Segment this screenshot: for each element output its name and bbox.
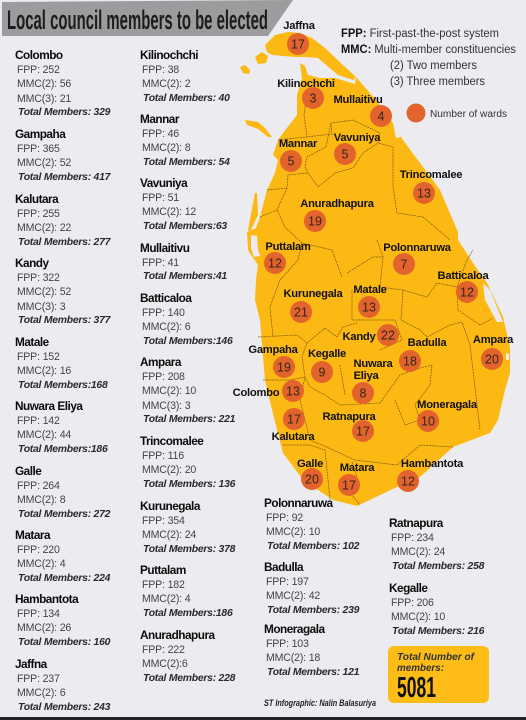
Kandy: Kandy	[15, 256, 49, 270]
Matara: Total Members: 224	[18, 573, 110, 584]
Colombo: MMC(3): 21	[17, 93, 71, 105]
district: Colombo: 13	[286, 384, 300, 398]
Kegalle: Kegalle	[389, 581, 427, 595]
Ratnapura: Ratnapura	[389, 516, 443, 530]
Puttalam: Total Members:186	[143, 608, 232, 619]
Moneragala	[264, 622, 359, 678]
Kandy: MMC(3): 3	[17, 301, 65, 313]
Ratnapura	[389, 516, 484, 572]
district: Kandy: 22	[381, 328, 395, 342]
total members box	[388, 646, 489, 704]
district: Kilinochchi: Kilinochchi	[277, 78, 335, 90]
Hambantota: Hambantota	[15, 592, 78, 606]
Kegalle: MMC(2): 10	[391, 611, 445, 623]
district: Nuwara Eliya: Nuwara	[354, 358, 393, 370]
Nuwara Eliya: Total Members:186	[18, 444, 108, 455]
Nuwara Eliya: Nuwara Eliya	[15, 399, 82, 413]
Ampara: MMC(3): 3	[142, 400, 190, 412]
district: Kilinochchi	[277, 78, 335, 109]
Kalutara: FPP: 255	[17, 208, 60, 220]
bottom bar	[0, 717, 526, 720]
district: Puttalam	[264, 241, 311, 274]
district: Kegalle	[308, 348, 346, 383]
Anuradhapura	[140, 628, 236, 684]
district: Jaffna: Jaffna	[283, 20, 316, 32]
Anuradhapura: Total Members: 228	[143, 673, 235, 684]
Jaffna: Total Members: 243	[18, 702, 110, 713]
district: Ampara	[473, 334, 514, 370]
Kalutara: Kalutara	[15, 192, 58, 206]
district: Badulla: 18	[403, 354, 417, 368]
Kalutara: MMC(2): 22	[17, 222, 71, 234]
Colombo	[15, 48, 110, 118]
Vavuniya: FPP: 51	[142, 192, 179, 204]
legend: abbreviations: MMC: Multi-member constituencies	[341, 44, 516, 56]
Galle: Galle	[15, 464, 41, 478]
Mullaitivu	[140, 241, 227, 282]
district: Mannar: Mannar	[279, 138, 318, 150]
Vavuniya: Vavuniya	[140, 176, 187, 190]
Anuradhapura: FPP: 222	[142, 644, 185, 656]
district: Badulla	[399, 337, 447, 372]
district: Kalutara: 17	[287, 412, 301, 426]
Batticaloa: Total Members:146	[143, 336, 232, 347]
district: Hambantota	[397, 458, 464, 492]
Ampara: MMC(2): 10	[142, 385, 196, 397]
district: Matale: Matale	[353, 284, 387, 296]
Matale: Total Members:168	[18, 380, 108, 391]
district: Polonnaruwa: 7	[401, 258, 408, 272]
district: Anuradhapura	[300, 198, 375, 232]
district: Ratnapura: 17	[356, 424, 370, 438]
district: Kegalle: 9	[319, 366, 326, 380]
district: Moneragala: 10	[421, 414, 435, 428]
district: Hambantota: Hambantota	[401, 458, 464, 470]
Kurunegala: FPP: 354	[142, 515, 185, 527]
Vavuniya	[140, 176, 227, 232]
Jaffna: Jaffna	[15, 657, 47, 671]
Kilinochchi: FPP: 38	[142, 64, 179, 76]
Colombo: Total Members: 329	[18, 107, 110, 118]
Colombo: MMC(2): 56	[17, 78, 71, 90]
district: Kandy: Kandy	[343, 331, 376, 343]
Batticaloa	[140, 291, 233, 347]
district: Kurunegala: Kurunegala	[283, 288, 344, 300]
Jaffna: FPP: 237	[17, 673, 60, 685]
Mannar: Total Members: 54	[143, 157, 230, 168]
Kurunegala	[140, 499, 236, 555]
district: Moneragala: Moneragala	[417, 399, 478, 411]
Badulla: FPP: 197	[266, 576, 309, 588]
Matara	[15, 528, 110, 584]
Kilinochchi: Total Members: 40	[143, 93, 230, 104]
Kilinochchi: Kilinochchi	[140, 48, 198, 62]
Hambantota: MMC(2): 26	[17, 622, 71, 634]
Batticaloa: MMC(2): 6	[142, 321, 190, 333]
district: Matara	[338, 462, 375, 496]
Trincomalee: Trincomalee	[140, 434, 203, 448]
district: Galle	[297, 458, 323, 490]
Kilinochchi	[140, 48, 230, 104]
Gampaha: Gampaha	[15, 127, 65, 141]
Polonnaruwa: FPP: 92	[266, 512, 303, 524]
district: Mullaitivu: 4	[378, 110, 385, 124]
district: Kegalle: Kegalle	[308, 348, 346, 360]
Kurunegala: Kurunegala	[140, 499, 200, 513]
district: Moneragala	[417, 399, 478, 432]
Ampara: FPP: 208	[142, 371, 185, 383]
legend: abbreviations: (3) Three members	[390, 76, 485, 88]
legend: number of wards: Number of wards	[430, 109, 507, 120]
Badulla: Badulla	[264, 560, 303, 574]
district: Nuwara Eliya: Eliya	[354, 370, 379, 382]
Vavuniya: Total Members:63	[143, 221, 227, 232]
Anuradhapura: MMC(2):6	[142, 658, 188, 670]
district: Colombo	[233, 380, 304, 402]
district: Mannar	[279, 138, 318, 172]
legend: abbreviations: FPP: First-past-the-post system	[341, 28, 499, 40]
district: Mullaitivu	[333, 94, 392, 127]
Ratnapura: MMC(2): 24	[391, 546, 445, 558]
Gampaha: FPP: 365	[17, 143, 60, 155]
Ratnapura: Total Members: 258	[392, 561, 484, 572]
title band	[2, 0, 293, 36]
Colombo: Colombo	[15, 48, 63, 62]
district: Gampaha: Gampaha	[248, 344, 299, 356]
district: Hambantota: 12	[401, 474, 415, 488]
district: Ampara: Ampara	[473, 334, 514, 346]
Batticaloa: FPP: 140	[142, 307, 185, 319]
Kurunegala: MMC(2): 24	[142, 529, 196, 541]
Gampaha	[15, 127, 111, 183]
Ampara: Ampara	[140, 355, 181, 369]
Kilinochchi: MMC(2): 2	[142, 78, 190, 90]
Polonnaruwa: Polonnaruwa	[264, 496, 333, 510]
Moneragala: Moneragala	[264, 622, 325, 636]
Badulla: MMC(2): 42	[266, 590, 320, 602]
Mullaitivu: Total Members:41	[143, 271, 227, 282]
Hambantota: FPP: 134	[17, 608, 60, 620]
district: Vavuniya: 5	[342, 148, 349, 162]
Matale: MMC(2): 16	[17, 365, 71, 377]
Moneragala: Total Members: 121	[267, 667, 359, 678]
Puttalam	[140, 563, 233, 619]
district: Gampaha	[248, 344, 299, 378]
district: Matara: Matara	[340, 462, 375, 474]
Hambantota	[15, 592, 110, 648]
Colombo: FPP: 252	[17, 64, 60, 76]
district: Matara: 17	[342, 478, 356, 492]
district: Polonnaruwa	[383, 242, 452, 275]
district: Mannar: 5	[288, 154, 295, 168]
Puttalam: FPP: 182	[142, 579, 185, 591]
district: Jaffna: 17	[291, 38, 305, 52]
lagoons	[251, 123, 509, 360]
Polonnaruwa	[264, 496, 360, 552]
Matara: FPP: 220	[17, 544, 60, 556]
total members box: members:	[397, 662, 444, 674]
Mannar: FPP: 46	[142, 128, 179, 140]
district: Kurunegala	[283, 288, 344, 323]
legend: abbreviations	[341, 28, 516, 88]
district: Kalutara	[272, 408, 315, 443]
Mullaitivu: Mullaitivu	[140, 241, 189, 255]
Ratnapura: FPP: 234	[391, 532, 434, 544]
Nuwara Eliya: MMC(2): 44	[17, 429, 71, 441]
Vavuniya: MMC(2): 12	[142, 206, 196, 218]
Polonnaruwa: MMC(2): 10	[266, 526, 320, 538]
legend: number of wards	[406, 104, 507, 122]
district: Ratnapura: Ratnapura	[322, 411, 377, 423]
Mannar: MMC(2): 8	[142, 142, 190, 154]
Matara: Matara	[15, 528, 50, 542]
district: Gampaha: 19	[277, 360, 291, 374]
district: Trincomalee: Trincomalee	[400, 169, 462, 181]
district: Puttalam: 12	[268, 256, 282, 270]
Matale	[15, 335, 108, 391]
Trincomalee	[140, 434, 236, 490]
Galle: Total Members: 272	[18, 509, 110, 520]
Gampaha: Total Members: 417	[18, 172, 110, 183]
Jaffna	[15, 657, 110, 713]
district: Matale	[353, 284, 387, 318]
Kegalle: FPP: 206	[391, 597, 434, 609]
legend: abbreviations: (2) Two members	[390, 60, 477, 72]
Kandy	[15, 256, 111, 326]
district: Batticaloa: Batticaloa	[438, 270, 490, 282]
district: Puttalam: Puttalam	[265, 241, 311, 253]
Ampara	[140, 355, 235, 425]
Badulla	[264, 560, 360, 616]
Kandy: Total Members: 377	[18, 315, 110, 326]
Matale: Matale	[15, 335, 49, 349]
Mannar	[140, 112, 230, 168]
Matale: FPP: 152	[17, 351, 60, 363]
total members box: 5081	[397, 672, 436, 704]
Kandy: MMC(2): 52	[17, 286, 71, 298]
district: Vavuniya	[334, 132, 381, 165]
district: Anuradhapura: Anuradhapura	[300, 198, 375, 210]
Badulla: Total Members: 239	[267, 605, 359, 616]
Batticaloa: Batticaloa	[140, 291, 191, 305]
Kalutara: Total Members: 277	[18, 237, 110, 248]
Trincomalee: Total Members: 136	[143, 479, 235, 490]
district: Nuwara Eliya	[352, 358, 393, 404]
district: Galle: 20	[305, 472, 319, 486]
district: Galle: Galle	[297, 458, 323, 470]
Galle	[15, 464, 110, 520]
Kurunegala: Total Members: 378	[143, 544, 235, 555]
Moneragala: MMC(2): 18	[266, 652, 320, 664]
district: Nuwara Eliya: 8	[360, 386, 367, 400]
district: Batticaloa: 12	[460, 286, 474, 300]
Mannar: Mannar	[140, 112, 179, 126]
district: Ratnapura	[322, 411, 377, 442]
district: Anuradhapura: 19	[308, 214, 322, 228]
Nuwara Eliya: FPP: 142	[17, 415, 60, 427]
district: Ampara: 20	[485, 352, 499, 366]
Galle: FPP: 264	[17, 480, 60, 492]
district: Jaffna	[283, 20, 316, 55]
Moneragala: FPP: 103	[266, 638, 309, 650]
Puttalam: MMC(2): 4	[142, 593, 190, 605]
district: Trincomalee: 13	[417, 186, 431, 200]
Ampara: Total Members: 221	[143, 414, 235, 425]
district: Polonnaruwa: Polonnaruwa	[383, 242, 452, 254]
Hambantota: Total Members: 160	[18, 637, 110, 648]
Gampaha: MMC(2): 52	[17, 157, 71, 169]
Trincomalee: FPP: 116	[142, 450, 184, 462]
Trincomalee: MMC(2): 20	[142, 464, 196, 476]
Matara: MMC(2): 4	[17, 558, 65, 570]
Mullaitivu: FPP: 41	[142, 257, 179, 269]
Kegalle: Total Members: 216	[392, 626, 484, 637]
Jaffna: MMC(2): 6	[17, 687, 65, 699]
Polonnaruwa: Total Members: 102	[267, 541, 359, 552]
district: Badulla: Badulla	[408, 337, 447, 349]
district: Batticaloa	[438, 270, 490, 303]
district: Kurunegala: 21	[294, 306, 308, 320]
total members box: Total Number of	[397, 651, 475, 663]
Galle: MMC(2): 8	[17, 494, 65, 506]
district: Kandy	[343, 324, 399, 346]
Kandy: FPP: 322	[17, 272, 60, 284]
Kegalle	[389, 581, 484, 637]
Kalutara	[15, 192, 111, 248]
district: Vavuniya: Vavuniya	[334, 132, 381, 144]
district: Matale: 13	[362, 300, 376, 314]
district: Kalutara: Kalutara	[272, 431, 315, 443]
district: Trincomalee	[400, 169, 462, 204]
Nuwara Eliya	[15, 399, 108, 455]
infographic credit: ST Infographic: Nalin Balasuriya	[264, 698, 376, 709]
district: Kilinochchi: 3	[310, 92, 317, 106]
Puttalam: Puttalam	[140, 563, 186, 577]
district: Mullaitivu: Mullaitivu	[333, 94, 383, 106]
map of Sri Lanka	[240, 32, 510, 506]
Anuradhapura: Anuradhapura	[140, 628, 215, 642]
district: Colombo: Colombo	[233, 387, 280, 399]
title band: Local council members to be elected	[7, 5, 268, 35]
